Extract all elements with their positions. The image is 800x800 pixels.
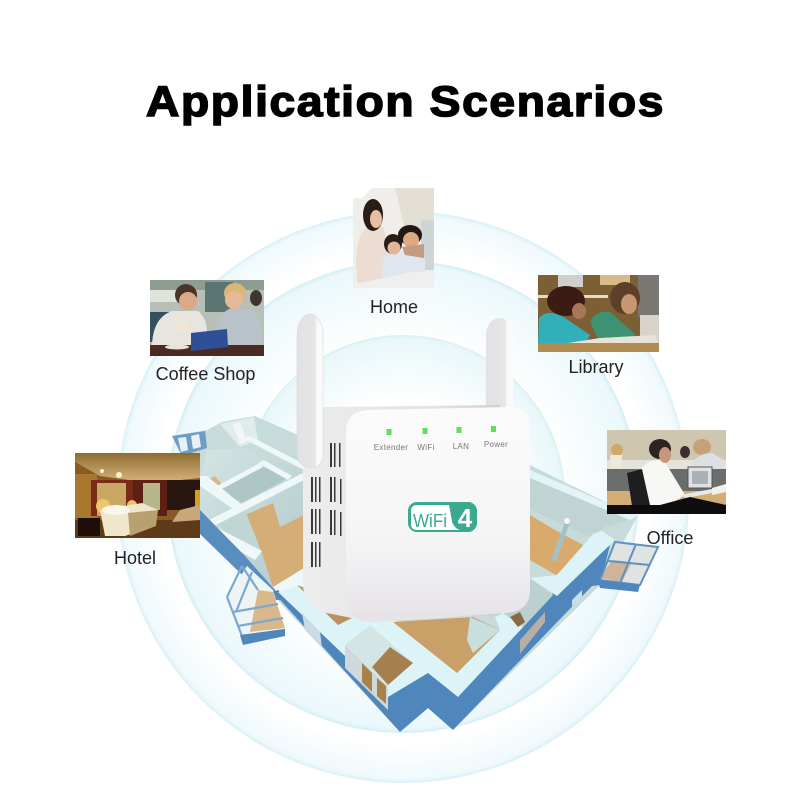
- label: coffee shop: Coffee Shop: [156, 364, 255, 384]
- left balcony: [227, 566, 285, 645]
- router side body: [303, 405, 500, 622]
- status LEDs: [386, 426, 496, 435]
- isometric house floor plan: [172, 416, 658, 732]
- top-left windows: [172, 417, 258, 456]
- title: Application Scenarios: [146, 78, 665, 126]
- WiFi 4 badge: 4: [458, 503, 473, 533]
- photo: hotel: [75, 453, 200, 538]
- lower right room: [503, 578, 553, 627]
- photo: home: [353, 188, 434, 288]
- status labels: Extender: [374, 443, 408, 452]
- router side vents: [311, 443, 342, 567]
- right antenna: [486, 318, 513, 412]
- white interior beams: [200, 436, 304, 600]
- label: hotel: Hotel: [114, 548, 156, 568]
- WiFi 4 badge: [408, 502, 477, 533]
- status labels: WiFi: [417, 443, 435, 452]
- label: home: Home: [370, 297, 418, 317]
- signal rings: [117, 211, 689, 783]
- bottom left floor: [297, 585, 352, 625]
- router: [297, 314, 530, 622]
- bottom small room: [345, 625, 413, 685]
- left blue wall: [200, 510, 280, 600]
- wall windows: [302, 590, 582, 710]
- WiFi 4 badge: WiFi: [413, 511, 447, 531]
- router front face: [346, 407, 530, 622]
- cyan wall top: [278, 578, 553, 697]
- label: office: Office: [647, 528, 693, 548]
- left rooms: [200, 448, 304, 590]
- label: library: Library: [568, 357, 624, 377]
- left antenna: [297, 314, 323, 468]
- photo: library: [538, 275, 659, 352]
- photo: coffee shop: [150, 280, 264, 356]
- bottom centre room: [393, 617, 500, 673]
- photo: office: [607, 430, 726, 514]
- house base: [172, 416, 637, 732]
- status labels: [374, 440, 508, 452]
- right balcony: [598, 542, 658, 592]
- status labels: Power: [484, 440, 508, 449]
- right walls and floor: [515, 464, 637, 596]
- front blue wall: [273, 545, 610, 732]
- status labels: LAN: [453, 442, 469, 451]
